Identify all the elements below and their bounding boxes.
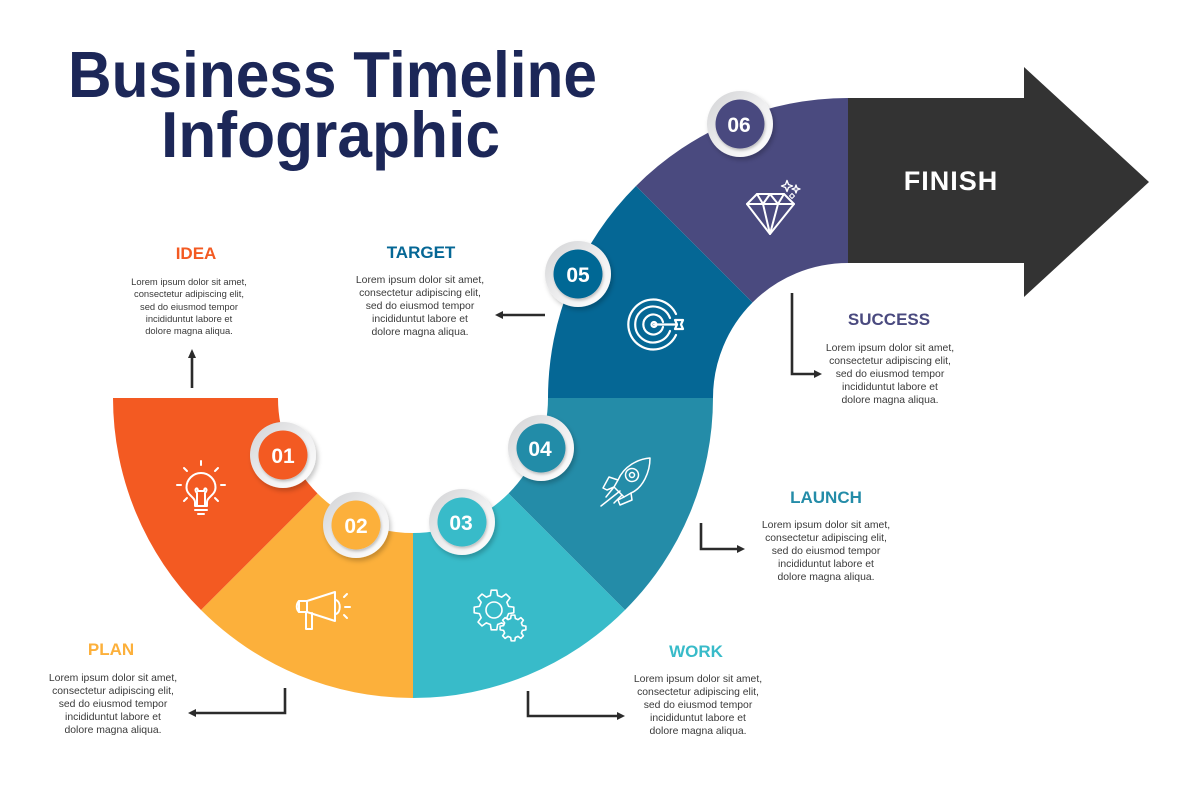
badge 04: 04	[528, 438, 552, 461]
text block: work: Lorem ipsum dolor sit amet,	[634, 674, 762, 685]
segment 02	[201, 494, 413, 698]
icon: light bulb	[177, 461, 225, 514]
text block: success: Lorem ipsum dolor sit amet,	[826, 343, 954, 354]
segment 05	[548, 186, 752, 398]
text block: target: TARGET	[387, 243, 456, 262]
text block: launch: LAUNCH	[790, 488, 862, 507]
text block: plan: Lorem ipsum dolor sit amet,	[49, 673, 177, 684]
text block: target: dolore magna aliqua.	[371, 327, 469, 338]
badge 03: 03	[449, 512, 473, 535]
finish arrow	[848, 67, 1149, 297]
text block: success: incididuntut labore et	[842, 382, 938, 393]
badge 04	[508, 415, 574, 481]
title: Business Timeline	[68, 38, 597, 111]
arrow: launch	[701, 523, 745, 553]
text block: idea: sed do eiusmod tempor	[140, 301, 238, 312]
text block: plan: dolore magna aliqua.	[64, 725, 162, 736]
text block: idea	[131, 244, 247, 336]
badge 06	[707, 91, 773, 157]
badge 06: 06	[727, 114, 751, 137]
arrow: plan	[188, 688, 285, 717]
text block: work: WORK	[669, 642, 724, 661]
text block: success: sed do eiusmod tempor	[836, 369, 945, 380]
text block: idea: Lorem ipsum dolor sit amet,	[131, 276, 247, 287]
text block: success: SUCCESS	[848, 310, 930, 329]
text block: target: consectetur adipiscing elit,	[359, 288, 481, 299]
text block: launch	[762, 488, 890, 583]
text block: idea: IDEA	[176, 244, 216, 263]
text block: idea: consectetur adipiscing elit,	[134, 288, 244, 299]
icon: diamond	[747, 180, 800, 234]
text block: plan: PLAN	[88, 640, 134, 659]
text block: work: sed do eiusmod tempor	[644, 700, 753, 711]
text block: launch: dolore magna aliqua.	[777, 572, 875, 583]
arrow: idea	[188, 349, 196, 388]
title	[68, 38, 597, 171]
text block: target: Lorem ipsum dolor sit amet,	[356, 275, 484, 286]
segment 06	[636, 98, 848, 302]
text block: work: incididuntut labore et	[650, 713, 746, 724]
text block: success: dolore magna aliqua.	[841, 395, 939, 406]
arrow: work	[528, 691, 625, 720]
text block: launch: consectetur adipiscing elit,	[765, 533, 887, 544]
text block: work: consectetur adipiscing elit,	[637, 687, 759, 698]
icon: gears	[474, 590, 526, 641]
badge 05: 05	[566, 264, 590, 287]
text block: work	[634, 642, 762, 737]
text block: success	[826, 310, 954, 406]
text block: target: incididuntut labore et	[372, 314, 468, 325]
badge 05	[545, 241, 611, 307]
text block: plan: consectetur adipiscing elit,	[52, 686, 174, 697]
icon: megaphone	[297, 592, 350, 629]
arrow: success	[792, 293, 822, 378]
badge 01: 01	[271, 445, 295, 468]
text block: success: consectetur adipiscing elit,	[829, 356, 951, 367]
finish arrow: FINISH	[904, 166, 998, 196]
text block: target: sed do eiusmod tempor	[366, 301, 475, 312]
title: Infographic	[161, 98, 500, 171]
text block: launch: sed do eiusmod tempor	[772, 546, 881, 557]
text block: target	[356, 243, 484, 338]
badge 02	[323, 492, 389, 558]
text block: work: dolore magna aliqua.	[649, 726, 747, 737]
text block: plan: incididuntut labore et	[65, 712, 161, 723]
segment 04	[508, 398, 713, 610]
text block: idea: dolore magna aliqua.	[145, 325, 233, 336]
text block: launch: incididuntut labore et	[778, 559, 874, 570]
arrow: target	[495, 311, 545, 319]
icon: target	[628, 300, 683, 350]
text block: plan	[49, 640, 177, 736]
segment 03	[413, 494, 625, 698]
segment 01	[113, 398, 318, 610]
text block: launch: Lorem ipsum dolor sit amet,	[762, 520, 890, 531]
badge 02: 02	[344, 515, 368, 538]
text block: plan: sed do eiusmod tempor	[59, 699, 168, 710]
badge 01	[250, 422, 316, 488]
text block: idea: incididuntut labore et	[146, 313, 233, 324]
icon: rocket	[601, 458, 650, 506]
badge 03	[429, 489, 495, 555]
